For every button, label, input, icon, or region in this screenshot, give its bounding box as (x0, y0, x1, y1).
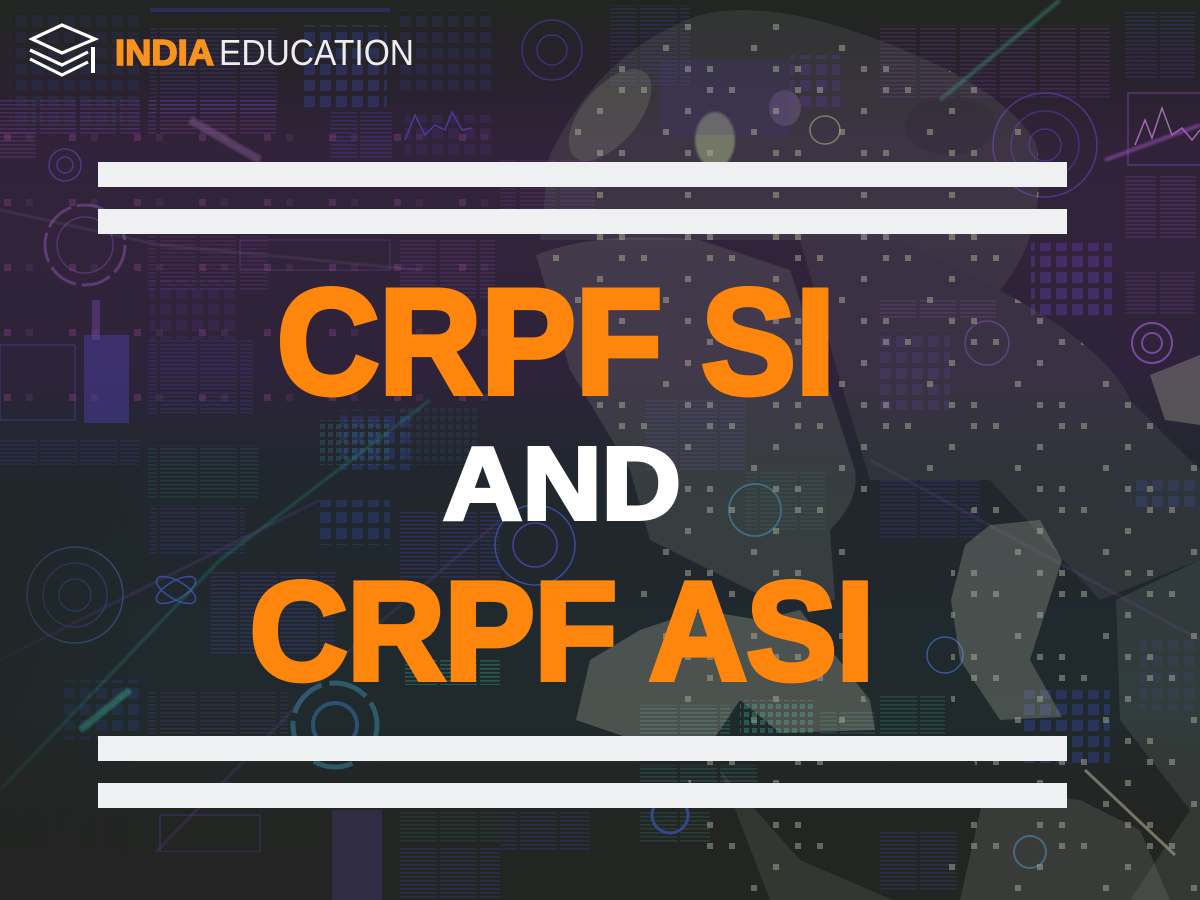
wordmark (115, 32, 414, 73)
helmet inner circuits (553, 55, 995, 175)
wordmark: INDIA (115, 32, 214, 73)
title line: CRPF ASI: CRPF ASI (250, 554, 874, 709)
bottom dark strip (0, 852, 330, 900)
pink marker squares (0, 90, 500, 420)
title line: AND: AND (443, 426, 681, 541)
wordmark: EDUCATION (219, 32, 414, 73)
bottom double rule (98, 736, 1067, 808)
diagonal strut (1085, 770, 1175, 855)
top double rule (98, 162, 1067, 234)
logo (30, 25, 414, 75)
top data panels (0, 5, 1195, 160)
right data panels (500, 160, 1200, 890)
right arm (951, 520, 1062, 720)
lower torso (960, 790, 1170, 900)
title (250, 258, 874, 709)
right body (1116, 560, 1200, 900)
face and jaw (536, 237, 856, 600)
middle-left data panels (0, 130, 495, 500)
lower arm (720, 770, 893, 900)
robot silhouette (252, 10, 1200, 900)
lower-left data panels (60, 500, 500, 900)
helmet dome (540, 10, 1039, 290)
hand on chin (576, 610, 875, 760)
left edge shadow (0, 480, 130, 900)
right forearm mechanism (1150, 355, 1200, 425)
icon: stacked graduation cap (30, 25, 95, 75)
line charts (405, 93, 1200, 165)
neck and shoulder (800, 240, 1200, 600)
title line: CRPF SI: CRPF SI (277, 258, 835, 425)
robot dot matrix (553, 24, 1197, 891)
